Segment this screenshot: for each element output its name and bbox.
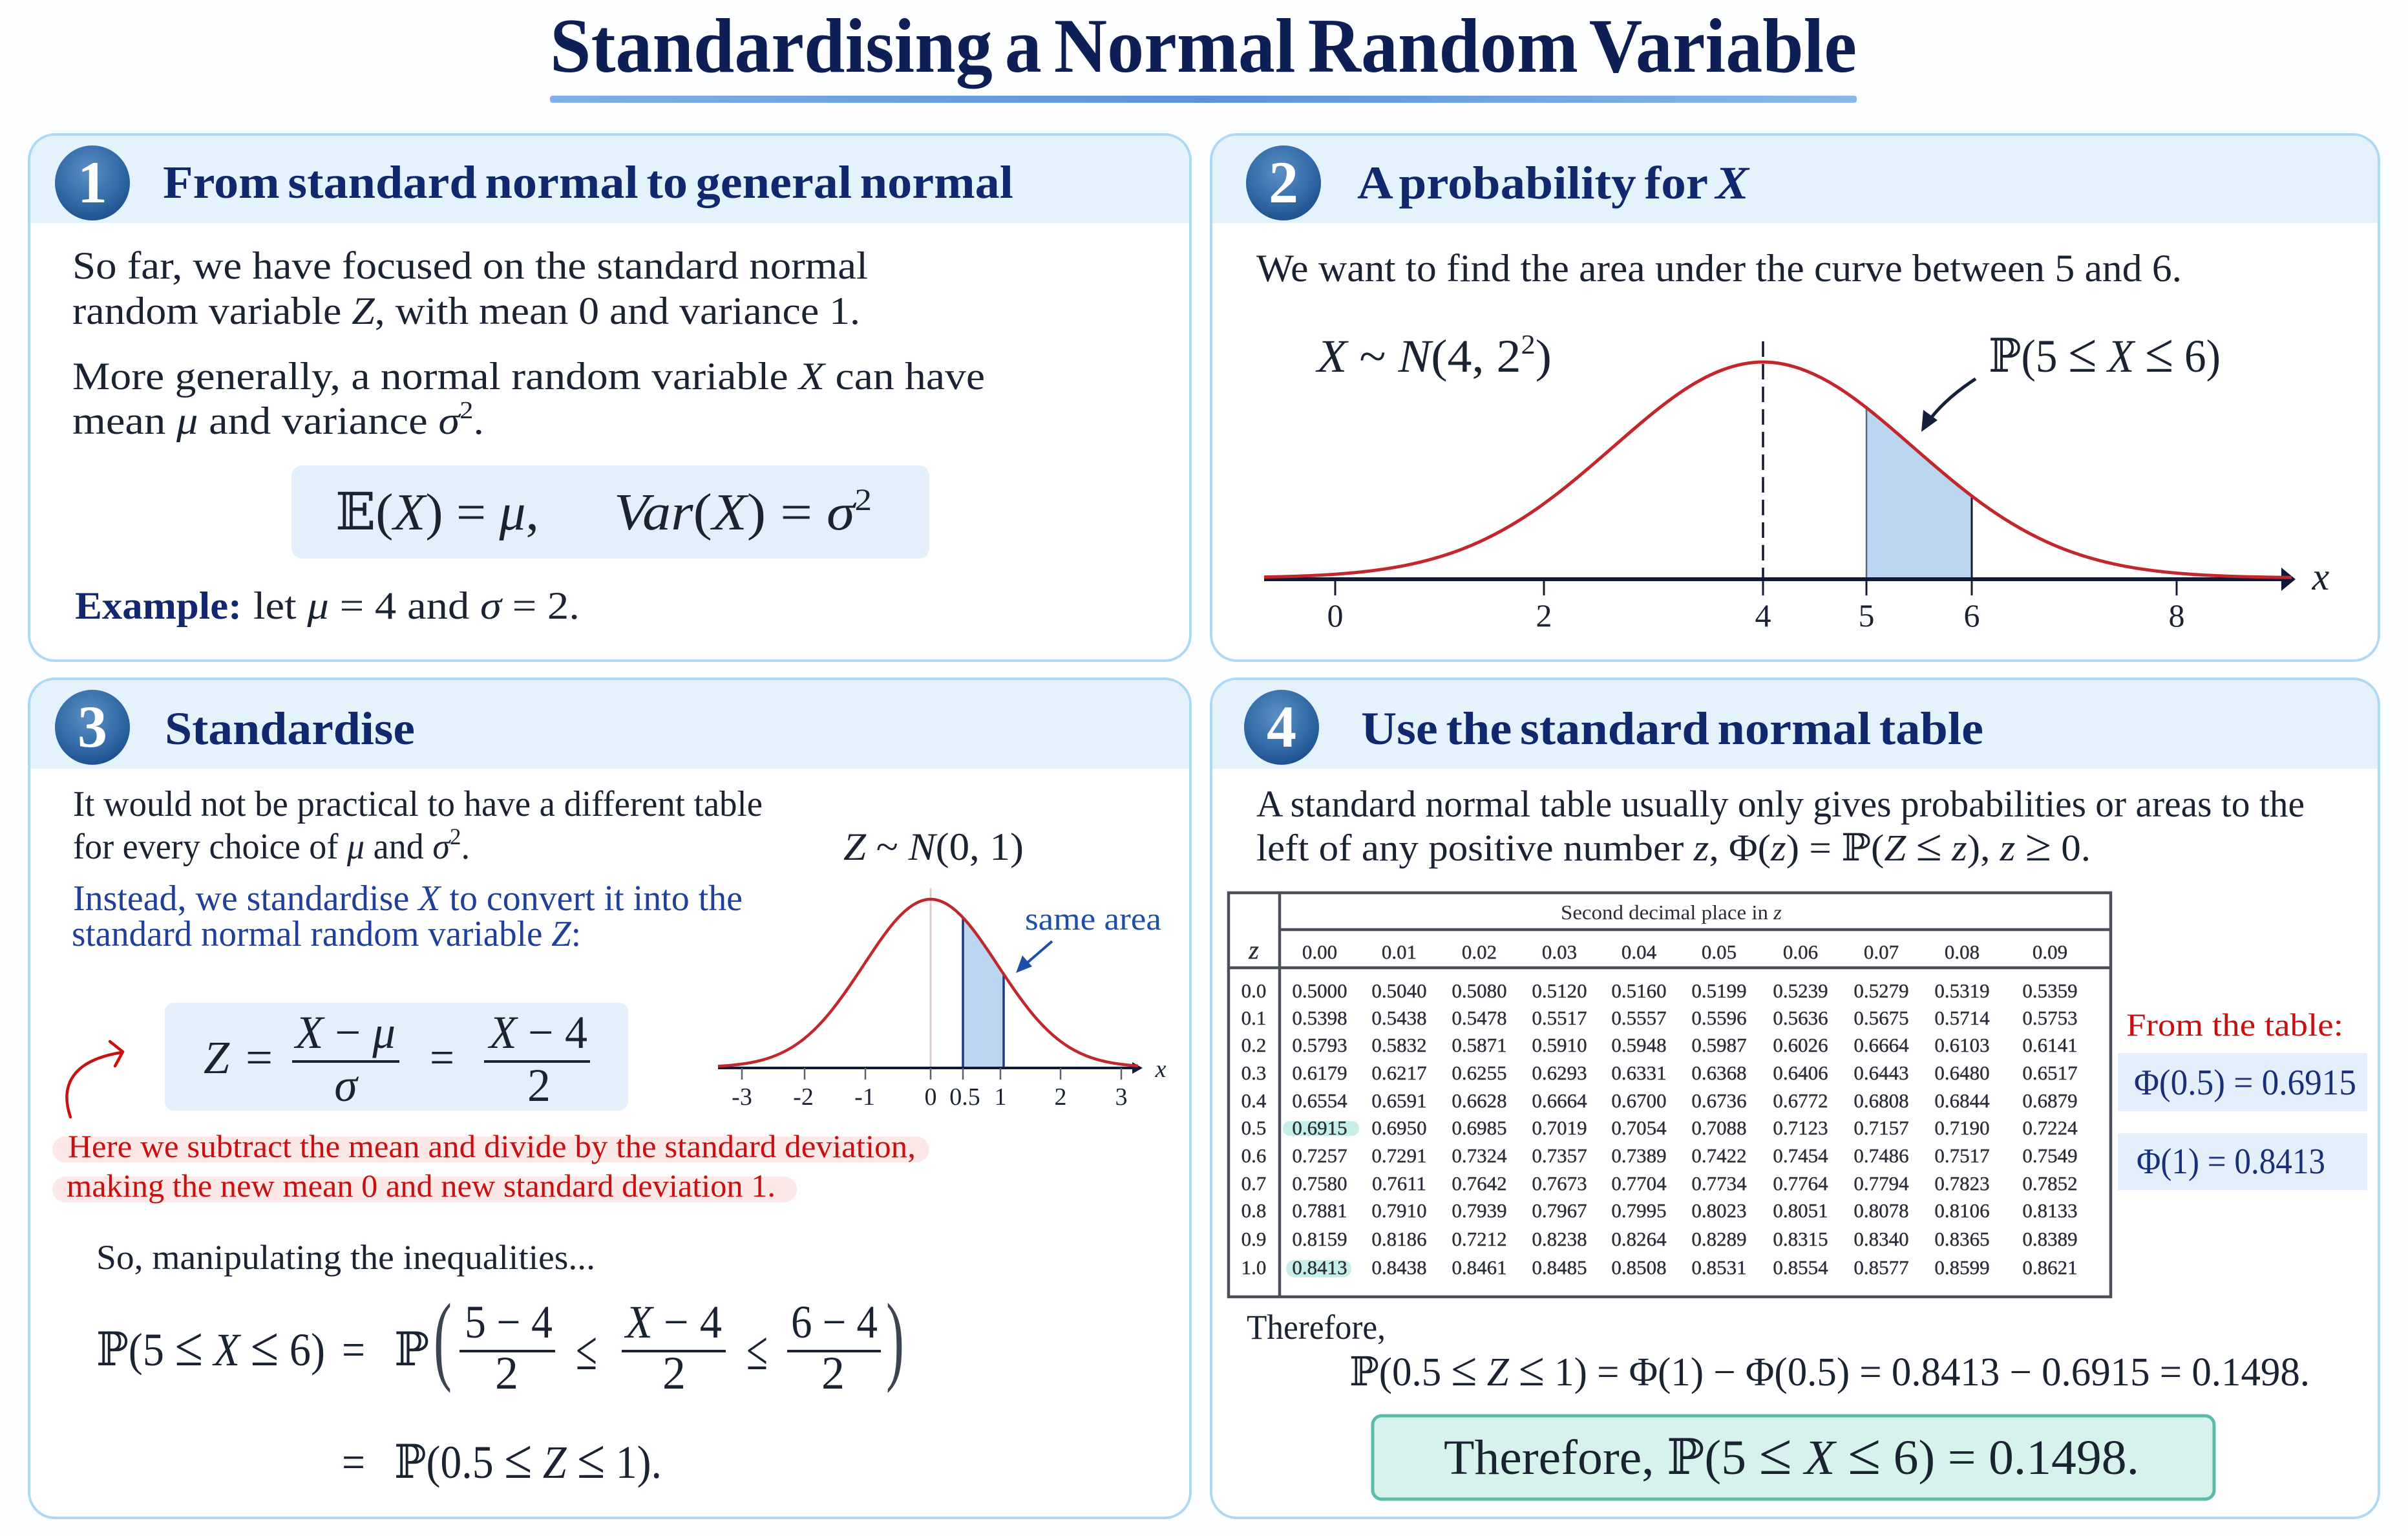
axis tick labels: 6 [1963, 597, 1980, 634]
table rows: 0.8413 [1292, 1256, 1347, 1279]
table rows: 0.5832 [1371, 1034, 1427, 1056]
standardise instruction [72, 879, 743, 954]
heading 2: A probability for X [1357, 157, 1750, 209]
panel: use the standard normal table [1211, 679, 2379, 1518]
title: Standardising a Normal Random Variable [550, 3, 1857, 89]
intro text: random variable Z, with mean 0 and variance 1. [72, 290, 860, 332]
axis name: x [2312, 555, 2330, 598]
inequality derivation: X − 4 [624, 1296, 722, 1348]
axis tick labels: 0 [1327, 597, 1343, 634]
axis tick labels: 5 [1859, 597, 1874, 634]
inequality derivation: ) [886, 1284, 904, 1394]
formula box: expectation and variance [291, 465, 929, 559]
table rows: 0.6915 [1292, 1116, 1347, 1139]
table rows: 0.7212 [1452, 1228, 1507, 1250]
table rows: 0.7054 [1611, 1116, 1667, 1139]
table rows: 0.5517 [1532, 1007, 1587, 1029]
table rows: 0.7157 [1854, 1116, 1909, 1139]
table rows: 0.7517 [1934, 1144, 1990, 1167]
formula box: Z definition: 2 [527, 1060, 551, 1111]
panel: a probability for X [1210, 133, 2380, 662]
callout: phi(1) [2118, 1133, 2367, 1190]
table rows: 0.8621 [2022, 1256, 2078, 1279]
red explanation note: making the new mean 0 and new standard deviation 1. [67, 1168, 776, 1204]
table rows: 0.5557 [1611, 1007, 1667, 1029]
badge 3: 3 [78, 694, 107, 760]
table explanation [1256, 783, 2305, 871]
badge 4 [1244, 690, 1319, 765]
table explanation: A standard normal table usually only gives probabilities or areas to the [1256, 783, 2305, 825]
table rows: 0.8315 [1773, 1228, 1828, 1250]
practicality text: . [461, 827, 470, 867]
heading 3: Standardise [165, 703, 415, 754]
example text: let μ = 4 and σ = 2. [253, 584, 580, 627]
table rows: 0.8599 [1934, 1256, 1990, 1279]
tick labels: 1 [994, 1083, 1007, 1111]
table rows: 0.7967 [1532, 1199, 1587, 1222]
tick labels: -3 [732, 1083, 752, 1111]
practicality text: for every choice of μ and σ [73, 827, 450, 867]
standard normal label: Z ~ N(0, 1) [843, 826, 1024, 868]
table rows: 0.7224 [2022, 1116, 2078, 1139]
table rows: 0.3 [1241, 1061, 1266, 1084]
table rows: 0.2 [1241, 1034, 1266, 1056]
panel 3 header band [30, 680, 1189, 712]
formula box: Z definition: σ [334, 1060, 359, 1111]
same area arrow [1016, 941, 1052, 973]
callout arrow [1921, 379, 1976, 432]
table rows: 0.7088 [1691, 1116, 1747, 1139]
table rows: 0.7549 [2022, 1144, 2078, 1167]
shaded area 0.5 to 1 [964, 921, 1003, 1067]
table rows: 0.7852 [2022, 1172, 2078, 1195]
red curve [718, 897, 1138, 1068]
table rows: 0.6368 [1691, 1061, 1747, 1084]
inequality derivation: 2 [662, 1347, 686, 1399]
practicality text: It would not be practical to have a different table [73, 784, 763, 824]
table rows: 0.6985 [1452, 1116, 1507, 1139]
badge 3 [55, 690, 130, 765]
table rows: 0.7123 [1773, 1116, 1828, 1139]
table rows: 0.8106 [1934, 1199, 1990, 1222]
from the table label: From the table: [2126, 1007, 2343, 1043]
table rows: 0.8531 [1691, 1256, 1747, 1279]
formula box: Z definition: = [246, 1032, 273, 1083]
table rows: 0.7257 [1292, 1144, 1347, 1167]
panel: standardise [29, 679, 1280, 1518]
table rows: 0.6141 [2022, 1034, 2078, 1056]
table explanation: left of any positive number z, Φ(z) = ℙ(Z ≤ z), z ≥ 0. [1256, 821, 2091, 871]
intro text [72, 244, 868, 332]
table rows: 0.7486 [1854, 1144, 1909, 1167]
table rows: 0.6808 [1854, 1089, 1909, 1112]
table rows: 0.6772 [1773, 1089, 1828, 1112]
table rows: 0.5040 [1371, 979, 1427, 1002]
table rows: 0.7422 [1691, 1144, 1747, 1167]
formula box: Z definition: X − μ [293, 1007, 396, 1058]
table rows: 0.6628 [1452, 1089, 1507, 1112]
inequality derivation: ≤ [746, 1319, 768, 1381]
table rows: 0.8 [1241, 1199, 1266, 1222]
table rows: 0.5319 [1934, 979, 1990, 1002]
final answer box [1373, 1416, 2214, 1499]
table rows: 0.8078 [1854, 1199, 1909, 1222]
shaded area 5 to 6 [1867, 410, 1971, 577]
general normal text: 2 [459, 397, 473, 424]
table rows: 0.7673 [1532, 1172, 1587, 1195]
inequality derivation: ℙ(0.5 ≤ Z ≤ 1). [394, 1428, 662, 1490]
table column heads: 0.00 [1302, 941, 1337, 963]
callout: phi(1): Φ(1) = 0.8413 [2137, 1142, 2325, 1182]
table column heads: 0.07 [1864, 941, 1899, 963]
table rows: 0.6179 [1292, 1061, 1347, 1084]
tick labels: -1 [854, 1083, 875, 1111]
callout: phi(0.5): Φ(0.5) = 0.6915 [2134, 1063, 2356, 1103]
formula box: expectation and variance: 𝔼(X) = μ, [335, 484, 539, 541]
inequality derivation: ℙ [394, 1324, 429, 1376]
table rows: 0.5871 [1452, 1034, 1507, 1056]
table rows: 0.7324 [1452, 1144, 1507, 1167]
table rows: 0.5359 [2022, 979, 2078, 1002]
highlight: 0.8413 [1286, 1260, 1351, 1277]
table rows: 0.8485 [1532, 1256, 1587, 1279]
table column heads: 0.01 [1382, 941, 1417, 963]
general normal text [72, 355, 985, 442]
table column heads: 0.08 [1945, 941, 1980, 963]
tick labels: 0.5 [949, 1083, 980, 1111]
practicality text [73, 784, 763, 867]
table rows: 0.7580 [1292, 1172, 1347, 1195]
red explanation note [52, 1128, 929, 1204]
table rows: 0.5239 [1773, 979, 1828, 1002]
table column heads: 0.05 [1702, 941, 1737, 963]
table rows: 0.5793 [1292, 1034, 1347, 1056]
table rows: 0.8264 [1611, 1228, 1667, 1250]
highlight: 0.6915 [1283, 1121, 1359, 1136]
formula box: Z definition: = [430, 1032, 454, 1083]
table rows: 0.8365 [1934, 1228, 1990, 1250]
axis tick labels: 2 [1536, 597, 1552, 634]
table rows: 0.8238 [1532, 1228, 1587, 1250]
table rows: 0.5636 [1773, 1007, 1828, 1029]
table rows: 0.6255 [1452, 1061, 1507, 1084]
inequality derivation: 5 − 4 [465, 1296, 553, 1348]
table rows: 0.6554 [1292, 1089, 1347, 1112]
table rows: 0.7611 [1372, 1172, 1426, 1195]
table rows: 0.5000 [1292, 979, 1347, 1002]
table rows: 0.8023 [1691, 1199, 1747, 1222]
red explanation note: Here we subtract the mean and divide by the standard deviation, [68, 1128, 916, 1164]
table rows: 0.6664 [1532, 1089, 1587, 1112]
badge 1 [55, 145, 130, 220]
inequality derivation: ( [434, 1284, 452, 1394]
table rows: 0.5199 [1691, 979, 1747, 1002]
table rows: 0.7823 [1934, 1172, 1990, 1195]
table rows: 0.6517 [2022, 1061, 2078, 1084]
table rows: 0.8133 [2022, 1199, 2078, 1222]
table rows: 0.6950 [1371, 1116, 1427, 1139]
table rows: 0.5080 [1452, 979, 1507, 1002]
inequality derivation: ≤ [576, 1319, 597, 1381]
table rows: 0.7357 [1532, 1144, 1587, 1167]
table rows: 0.8508 [1611, 1256, 1667, 1279]
table rows: 0.5948 [1611, 1034, 1667, 1056]
example text: Example: [75, 584, 242, 627]
table rows: 0.6406 [1773, 1061, 1828, 1084]
table rows: 0.6664 [1854, 1034, 1909, 1056]
table rows: 1.0 [1241, 1256, 1266, 1279]
table rows: 0.7995 [1611, 1199, 1667, 1222]
table rows: 0.5 [1241, 1116, 1266, 1139]
inequality derivation: 6 − 4 [791, 1296, 878, 1348]
table rows: 0.6217 [1371, 1061, 1427, 1084]
distribution label: ) [1536, 330, 1552, 382]
badge 4: 4 [1267, 694, 1296, 760]
table rows: 0.7019 [1532, 1116, 1587, 1139]
table rows: 0.6480 [1934, 1061, 1990, 1084]
table rows: 0.6700 [1611, 1089, 1667, 1112]
panel 4 header band [1212, 680, 2378, 712]
table rows: 0.5160 [1611, 979, 1667, 1002]
distribution label: 2 [1521, 330, 1536, 360]
table rows: 0.8577 [1854, 1256, 1909, 1279]
tick labels: -2 [793, 1083, 814, 1111]
panel 2 header band [1212, 136, 2378, 168]
table rows: 0.5478 [1452, 1007, 1507, 1029]
standardise instruction: standard normal random variable Z: [72, 914, 581, 954]
table column heads: z [1248, 935, 1259, 965]
general normal text: More generally, a normal random variable X can have [72, 355, 985, 398]
example text [75, 584, 580, 627]
axis tick labels: 4 [1755, 597, 1771, 634]
heading 4: Use the standard normal table [1361, 703, 1983, 754]
table rows: 0.6591 [1371, 1089, 1427, 1112]
tick labels: 2 [1055, 1083, 1066, 1111]
description: We want to find the area under the curve between 5 and 6. [1256, 247, 2182, 290]
general normal text: mean μ and variance σ [72, 400, 458, 442]
heading 1: From standard normal to general normal [163, 156, 1013, 208]
table rows: 0.7 [1241, 1172, 1266, 1195]
table rows: 0.5279 [1854, 979, 1909, 1002]
table rows: 0.8461 [1452, 1256, 1507, 1279]
table rows: 0.6293 [1532, 1061, 1587, 1084]
table rows: 0.5438 [1371, 1007, 1427, 1029]
axis name: x [1155, 1056, 1167, 1083]
tick labels: 3 [1115, 1083, 1127, 1111]
table rows: 0.1 [1241, 1007, 1266, 1029]
table rows: 0.5714 [1934, 1007, 1990, 1029]
table rows: 0.4 [1241, 1089, 1267, 1112]
table rows: 0.5596 [1691, 1007, 1747, 1029]
panel 1 header band [30, 136, 1189, 168]
formula box: expectation and variance: Var(X) = σ [614, 484, 852, 541]
table column heads: 0.06 [1783, 941, 1818, 963]
inequality derivation [96, 1284, 904, 1490]
inequality derivation: ℙ(5 ≤ X ≤ 6) [96, 1316, 325, 1378]
inequality derivation: 2 [495, 1347, 518, 1399]
final answer box: Therefore, ℙ(5 ≤ X ≤ 6) = 0.1498. [1444, 1422, 2139, 1487]
table super-heading: Second decimal place in z [1561, 901, 1782, 924]
standardise instruction: Instead, we standardise X to convert it into the [73, 879, 743, 919]
x axis [718, 1067, 1136, 1069]
normal curve chart [1264, 341, 2329, 627]
practicality text: 2 [450, 824, 461, 849]
table rows: 0.6 [1241, 1144, 1266, 1167]
table rows: 0.8438 [1371, 1256, 1427, 1279]
table rows: 0.6103 [1934, 1034, 1990, 1056]
table rows: 0.8554 [1773, 1256, 1828, 1279]
table rows: 0.6026 [1773, 1034, 1828, 1056]
table column heads: 0.04 [1621, 941, 1657, 963]
inequality derivation: = [342, 1324, 365, 1376]
probability calculation: ℙ(0.5 ≤ Z ≤ 1) = Φ(1) − Φ(0.5) = 0.8413 − 0.6915 = 0.1498. [1349, 1343, 2310, 1396]
table rows: 0.8051 [1773, 1199, 1828, 1222]
table rows: 0.7389 [1611, 1144, 1667, 1167]
table rows: 0.8186 [1371, 1228, 1427, 1250]
table rows: 0.5987 [1691, 1034, 1747, 1056]
table rows: 0.8159 [1292, 1228, 1347, 1250]
table rows: 0.7454 [1773, 1144, 1828, 1167]
formula box: Z definition: X − 4 [487, 1007, 587, 1058]
table rows: 0.0 [1241, 979, 1266, 1002]
table rows: 0.9 [1241, 1228, 1266, 1250]
intro text: So far, we have focused on the standard normal [72, 244, 868, 287]
table column heads: 0.02 [1462, 941, 1497, 963]
table rows: 0.5398 [1292, 1007, 1347, 1029]
table rows: 0.8340 [1854, 1228, 1909, 1250]
table rows: 0.7704 [1611, 1172, 1667, 1195]
table rows: 0.6879 [2022, 1089, 2078, 1112]
table rows: 0.7794 [1854, 1172, 1909, 1195]
table rows: 0.7190 [1934, 1116, 1990, 1139]
table rows: 0.7910 [1371, 1199, 1427, 1222]
table rows: 0.7642 [1452, 1172, 1507, 1195]
standard normal table [1229, 893, 2111, 1297]
standard normal chart [718, 888, 1166, 1105]
badge 2 [1246, 145, 1321, 220]
axis tick labels: 8 [2169, 597, 2184, 634]
tick labels: 0 [924, 1083, 937, 1111]
same area label: same area [1025, 901, 1161, 937]
table rows: 0.6443 [1854, 1061, 1909, 1084]
general normal text: . [473, 400, 484, 442]
table rows: 0.6844 [1934, 1089, 1990, 1112]
table column heads: 0.03 [1542, 941, 1577, 963]
formula box: expectation and variance: 2 [855, 483, 872, 517]
x axis [1264, 577, 2285, 581]
panel: from standard normal to general normal [29, 134, 1190, 661]
table rows: 0.7939 [1452, 1199, 1507, 1222]
therefore text: Therefore, [1247, 1308, 1386, 1347]
table rows: 0.7881 [1292, 1199, 1347, 1222]
table rows: 0.6736 [1691, 1089, 1747, 1112]
table rows: 0.8389 [2022, 1228, 2078, 1250]
table rows: 0.5753 [2022, 1007, 2078, 1029]
table rows: 0.8289 [1691, 1228, 1747, 1250]
table rows: 0.5120 [1532, 979, 1587, 1002]
red curved arrow [67, 1041, 123, 1117]
inequality derivation: = [342, 1436, 365, 1488]
formula box: Z definition [165, 1003, 628, 1111]
table rows: 0.6331 [1611, 1061, 1667, 1084]
table column heads: 0.09 [2033, 941, 2067, 963]
table rows [1241, 979, 2078, 1279]
distribution label: X ~ N(4, 2 [1317, 330, 1516, 382]
callout: phi(0.5) [2118, 1053, 2367, 1111]
table rows: 0.5910 [1532, 1034, 1587, 1056]
table rows: 0.7764 [1773, 1172, 1828, 1195]
formula box: Z definition: Z [204, 1032, 230, 1083]
manipulating text: So, manipulating the inequalities... [96, 1238, 595, 1277]
badge 2: 2 [1269, 149, 1298, 215]
table rows: 0.5675 [1854, 1007, 1909, 1029]
badge 1: 1 [78, 149, 107, 215]
table rows: 0.7291 [1371, 1144, 1427, 1167]
probability label: ℙ(5 ≤ X ≤ 6) [1989, 322, 2221, 384]
red curve [1264, 361, 2292, 579]
inequality derivation: 2 [821, 1347, 845, 1399]
table rows: 0.7734 [1691, 1172, 1747, 1195]
